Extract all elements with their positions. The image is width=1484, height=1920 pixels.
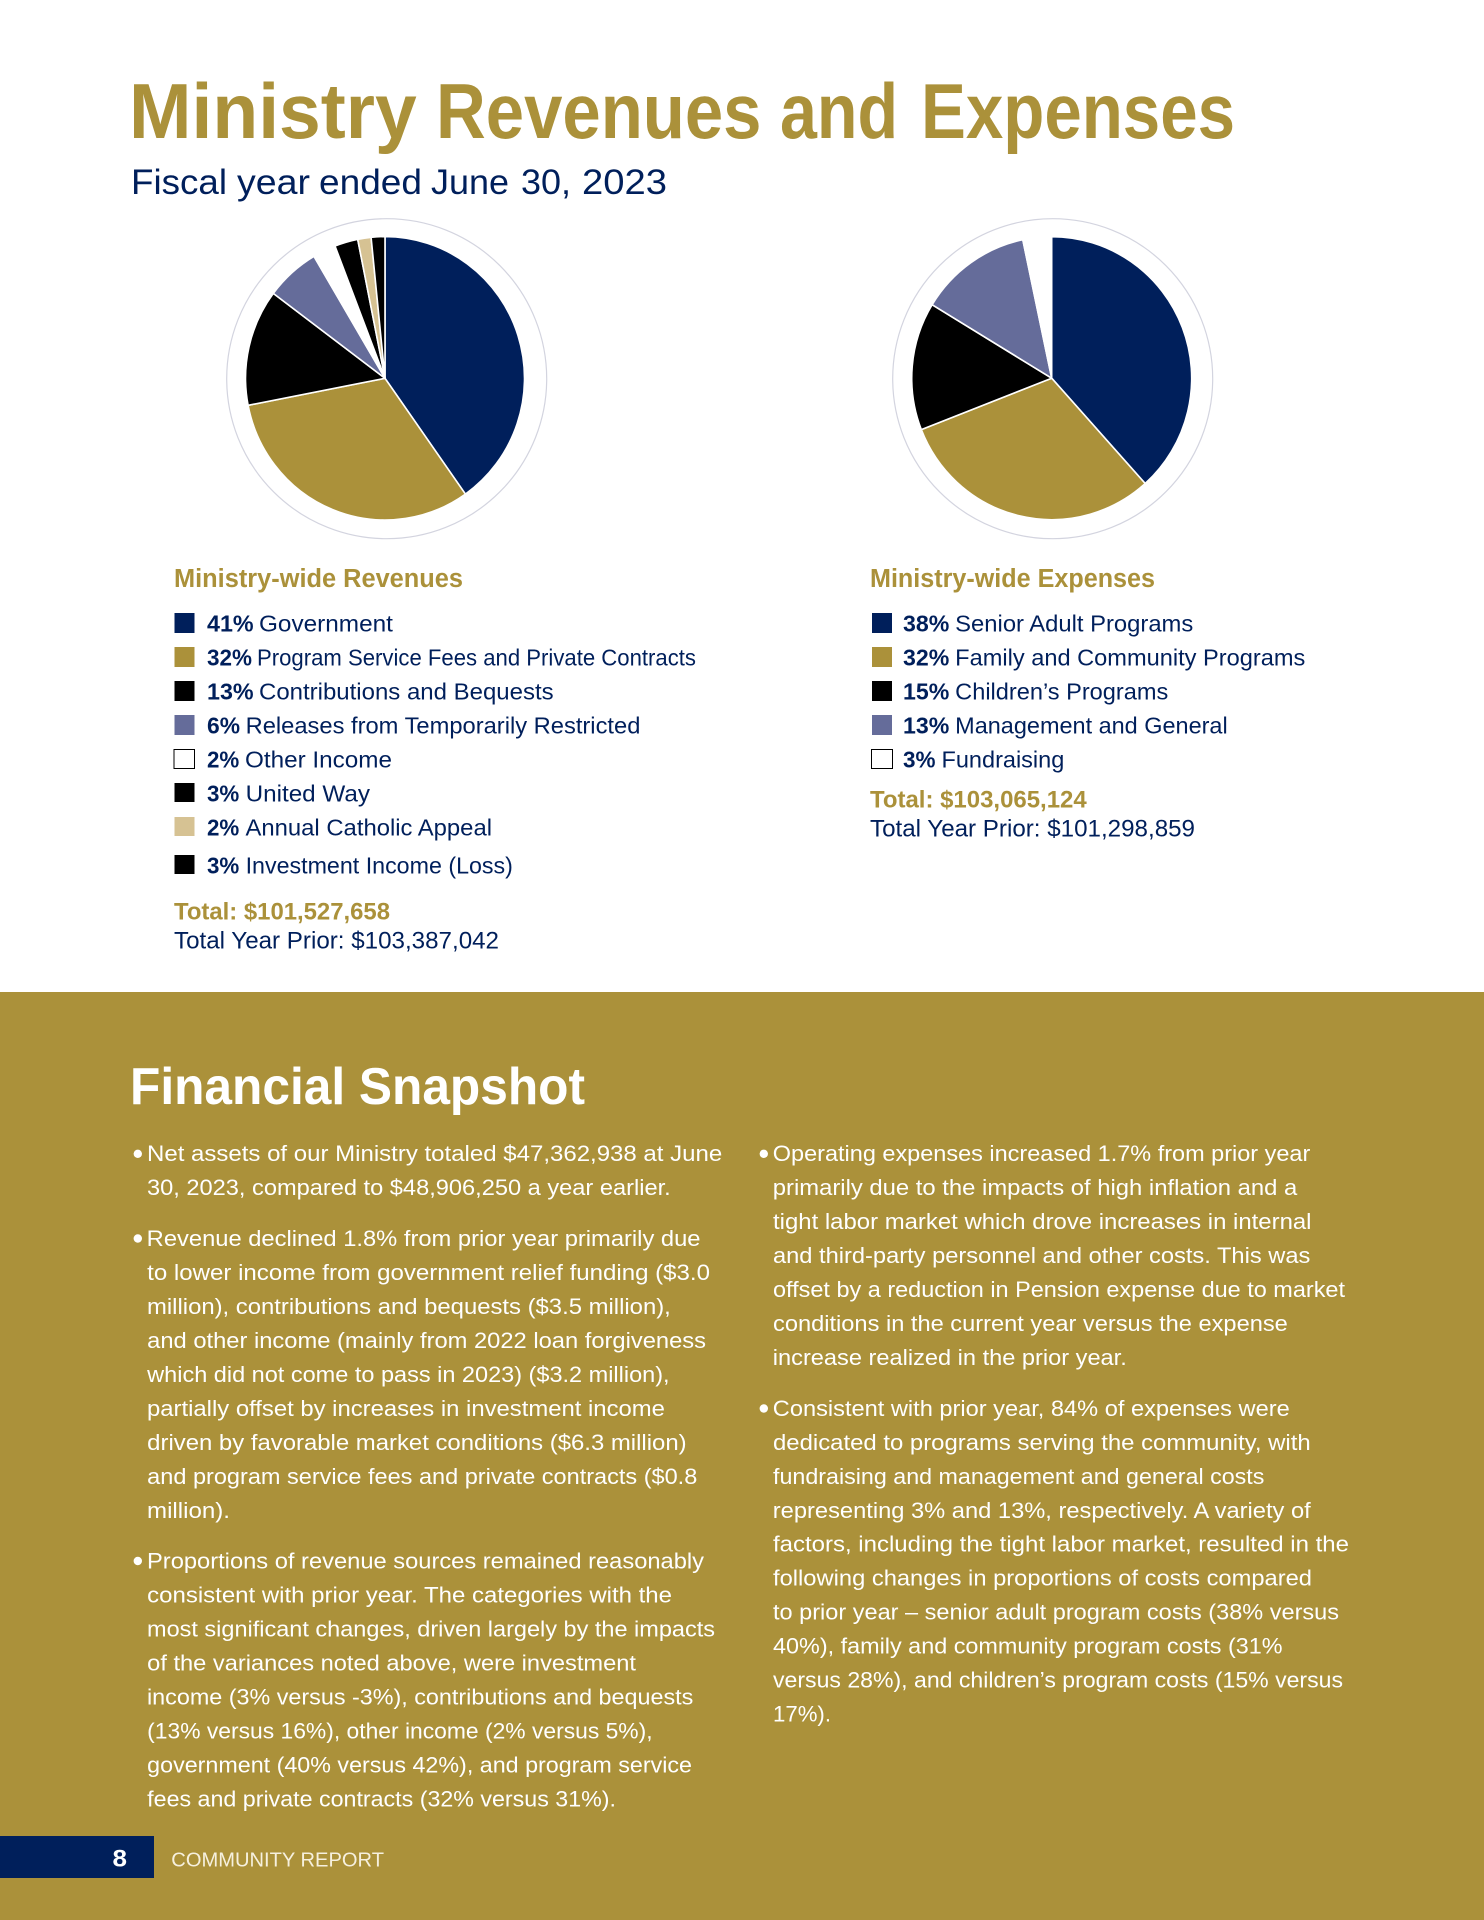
legend item: fundraising: 3%: [903, 747, 936, 773]
legend item: united way: [174, 781, 371, 807]
legend item: family and community programs: Family and Community Programs: [955, 645, 1305, 671]
bullet: revenue decline: Revenue declined 1.8% from prior year primarily due: [147, 1226, 700, 1251]
bullet: revenue decline: driven by favorable market conditions ($6.3 million): [147, 1430, 687, 1455]
bullet: revenue decline: and other income (mainly from 2022 loan forgiveness: [147, 1328, 706, 1353]
bullet: consistent with prior year: following changes in proportions of costs compared: [773, 1566, 1312, 1591]
legend heading: revenues: Ministry-wide Revenues: [174, 565, 463, 593]
bullet: operating expenses: conditions in the current year versus the expense: [773, 1311, 1288, 1336]
legend item: releases: 6%: [207, 713, 240, 739]
footer: publication label: COMMUNITY REPORT: [171, 1849, 384, 1872]
title: Expenses: [921, 67, 1235, 155]
subtitle: Fiscal: [131, 163, 227, 202]
revenue total: Total: $101,527,658: [174, 898, 390, 925]
legend item: investment income: 3%: [207, 852, 239, 878]
bullet: consistent with prior year: 40%), family and community program costs (31%: [773, 1634, 1283, 1659]
expense total: Total: $103,065,124: [870, 786, 1087, 813]
title: [129, 67, 1235, 155]
subtitle: 2023: [582, 163, 667, 202]
legend item: children's programs: 15%: [903, 679, 949, 705]
legend item: fundraising: [872, 747, 1064, 773]
legend item: government: Government: [259, 611, 394, 637]
bullet: operating expenses: primarily due to the impacts of high inflation and a: [773, 1175, 1298, 1200]
bullet: proportions of revenue: government (40% versus 42%), and program service: [147, 1753, 692, 1778]
legend item: other income: 2%: [207, 747, 239, 773]
bullet: revenue decline: and program service fees and private contracts ($0.8: [147, 1464, 697, 1489]
bullet: revenue decline: which did not come to pass in 2023) ($3.2 million),: [146, 1362, 670, 1387]
legend item: contributions: 13%: [207, 679, 254, 705]
legend item: releases: Releases from Temporarily Restricted: [246, 713, 640, 739]
bullet: proportions of revenue: Proportions of revenue sources remained reasonably: [147, 1548, 705, 1573]
bullet: proportions of revenue: income (3% versus -3%), contributions and bequests: [147, 1685, 693, 1710]
legend item: senior adult programs: Senior Adult Programs: [955, 611, 1193, 637]
legend panel: ministry-wide revenues: [174, 565, 696, 955]
legend item: management and general: Management and General: [955, 713, 1228, 739]
legend item: children's programs: Children’s Programs: [955, 679, 1168, 705]
bullet: consistent with prior year: fundraising and management and general costs: [773, 1464, 1264, 1489]
bullet: consistent with prior year: [760, 1396, 1349, 1727]
pie chart: ministry-wide expenses: [893, 219, 1213, 539]
legend item: other income: Other Income: [245, 747, 392, 773]
bullet: operating expenses: tight labor market which drove increases in internal: [773, 1209, 1312, 1234]
bullet: operating expenses: offset by a reduction in Pension expense due to market: [773, 1277, 1346, 1302]
bullet: operating expenses: and third-party personnel and other costs. This was: [773, 1243, 1310, 1268]
bullet: revenue decline: partially offset by increases in investment income: [147, 1396, 665, 1421]
legend item: government: 41%: [207, 611, 254, 637]
subtitle: [131, 163, 667, 202]
revenue prior year total: Total Year Prior: $103,387,042: [174, 928, 499, 955]
legend item: fundraising: Fundraising: [942, 747, 1064, 773]
subtitle: ended: [319, 163, 422, 202]
bullet: consistent with prior year: factors, including the tight labor market, resulted in the: [773, 1532, 1349, 1557]
subtitle: year: [237, 163, 310, 202]
bullet: operating expenses: [760, 1141, 1346, 1370]
footer: page number tab: [0, 1836, 154, 1878]
legend item: other income: [174, 747, 392, 773]
legend item: government: [174, 611, 394, 637]
bullet: consistent with prior year: versus 28%), and children’s program costs (15% versus: [773, 1668, 1343, 1693]
title: Ministry: [129, 67, 417, 155]
pie chart: ministry-wide revenues: [227, 219, 547, 539]
legend item: annual catholic appeal: 2%: [207, 815, 239, 841]
legend item: program service fees: Program Service Fees and Private Contracts: [257, 645, 696, 671]
bullet: net assets: Net assets of our Ministry totaled $47,362,938 at June: [147, 1141, 722, 1166]
bullet: revenue decline: to lower income from government relief funding ($3.0: [147, 1260, 710, 1285]
bullet: operating expenses: Operating expenses increased 1.7% from prior year: [773, 1141, 1311, 1166]
subtitle: 30,: [521, 163, 571, 202]
bullet: net assets: 30, 2023, compared to $48,906,250 a year earlier.: [147, 1175, 671, 1200]
bullet: consistent with prior year: representing 3% and 13%, respectively. A variety of: [773, 1498, 1311, 1523]
bullet: revenue decline: million), contributions and bequests ($3.5 million),: [147, 1294, 671, 1319]
bullet: proportions of revenue: (13% versus 16%), other income (2% versus 5%),: [147, 1719, 653, 1744]
bullet: revenue decline: [134, 1226, 710, 1523]
legend item: senior adult programs: 38%: [903, 611, 949, 637]
heading: financial snapshot: Financial Snapshot: [130, 1058, 585, 1116]
bullet: net assets: [134, 1141, 722, 1200]
legend heading: expenses: Ministry-wide Expenses: [870, 565, 1155, 593]
legend item: investment income: Investment Income (Loss): [246, 852, 513, 878]
bullet: proportions of revenue: most significant changes, driven largely by the impacts: [147, 1617, 715, 1642]
legend item: united way: United Way: [246, 781, 371, 807]
subtitle: June: [431, 163, 509, 202]
bullet: consistent with prior year: to prior year – senior adult program costs (38% versus: [773, 1600, 1339, 1625]
bullet: proportions of revenue: of the variances noted above, were investment: [147, 1651, 637, 1676]
legend item: united way: 3%: [207, 781, 239, 807]
bullet: proportions of revenue: [134, 1548, 715, 1812]
bullet: operating expenses: increase realized in the prior year.: [773, 1345, 1127, 1370]
bullet: consistent with prior year: 17%).: [773, 1702, 831, 1727]
bullet: consistent with prior year: Consistent with prior year, 84% of expenses were: [773, 1396, 1290, 1421]
bullet: consistent with prior year: dedicated to programs serving the community, with: [773, 1430, 1311, 1455]
legend item: management and general: 13%: [903, 713, 949, 739]
legend item: contributions: Contributions and Bequests: [259, 679, 554, 705]
legend item: family and community programs: 32%: [903, 645, 949, 671]
bullet: proportions of revenue: fees and private contracts (32% versus 31%).: [147, 1787, 616, 1812]
bullet: proportions of revenue: consistent with prior year. The categories with the: [147, 1582, 672, 1607]
bullet: revenue decline: million).: [147, 1498, 230, 1523]
legend panel: ministry-wide expenses: [870, 565, 1305, 843]
expense prior year total: Total Year Prior: $101,298,859: [870, 816, 1195, 843]
footer: page number tab: 8: [112, 1846, 127, 1873]
panel: financial snapshot: [0, 992, 1484, 1920]
legend item: annual catholic appeal: Annual Catholic Appeal: [246, 815, 492, 841]
title: and: [780, 67, 898, 155]
legend item: program service fees: 32%: [207, 645, 252, 671]
title: Revenues: [436, 67, 762, 155]
